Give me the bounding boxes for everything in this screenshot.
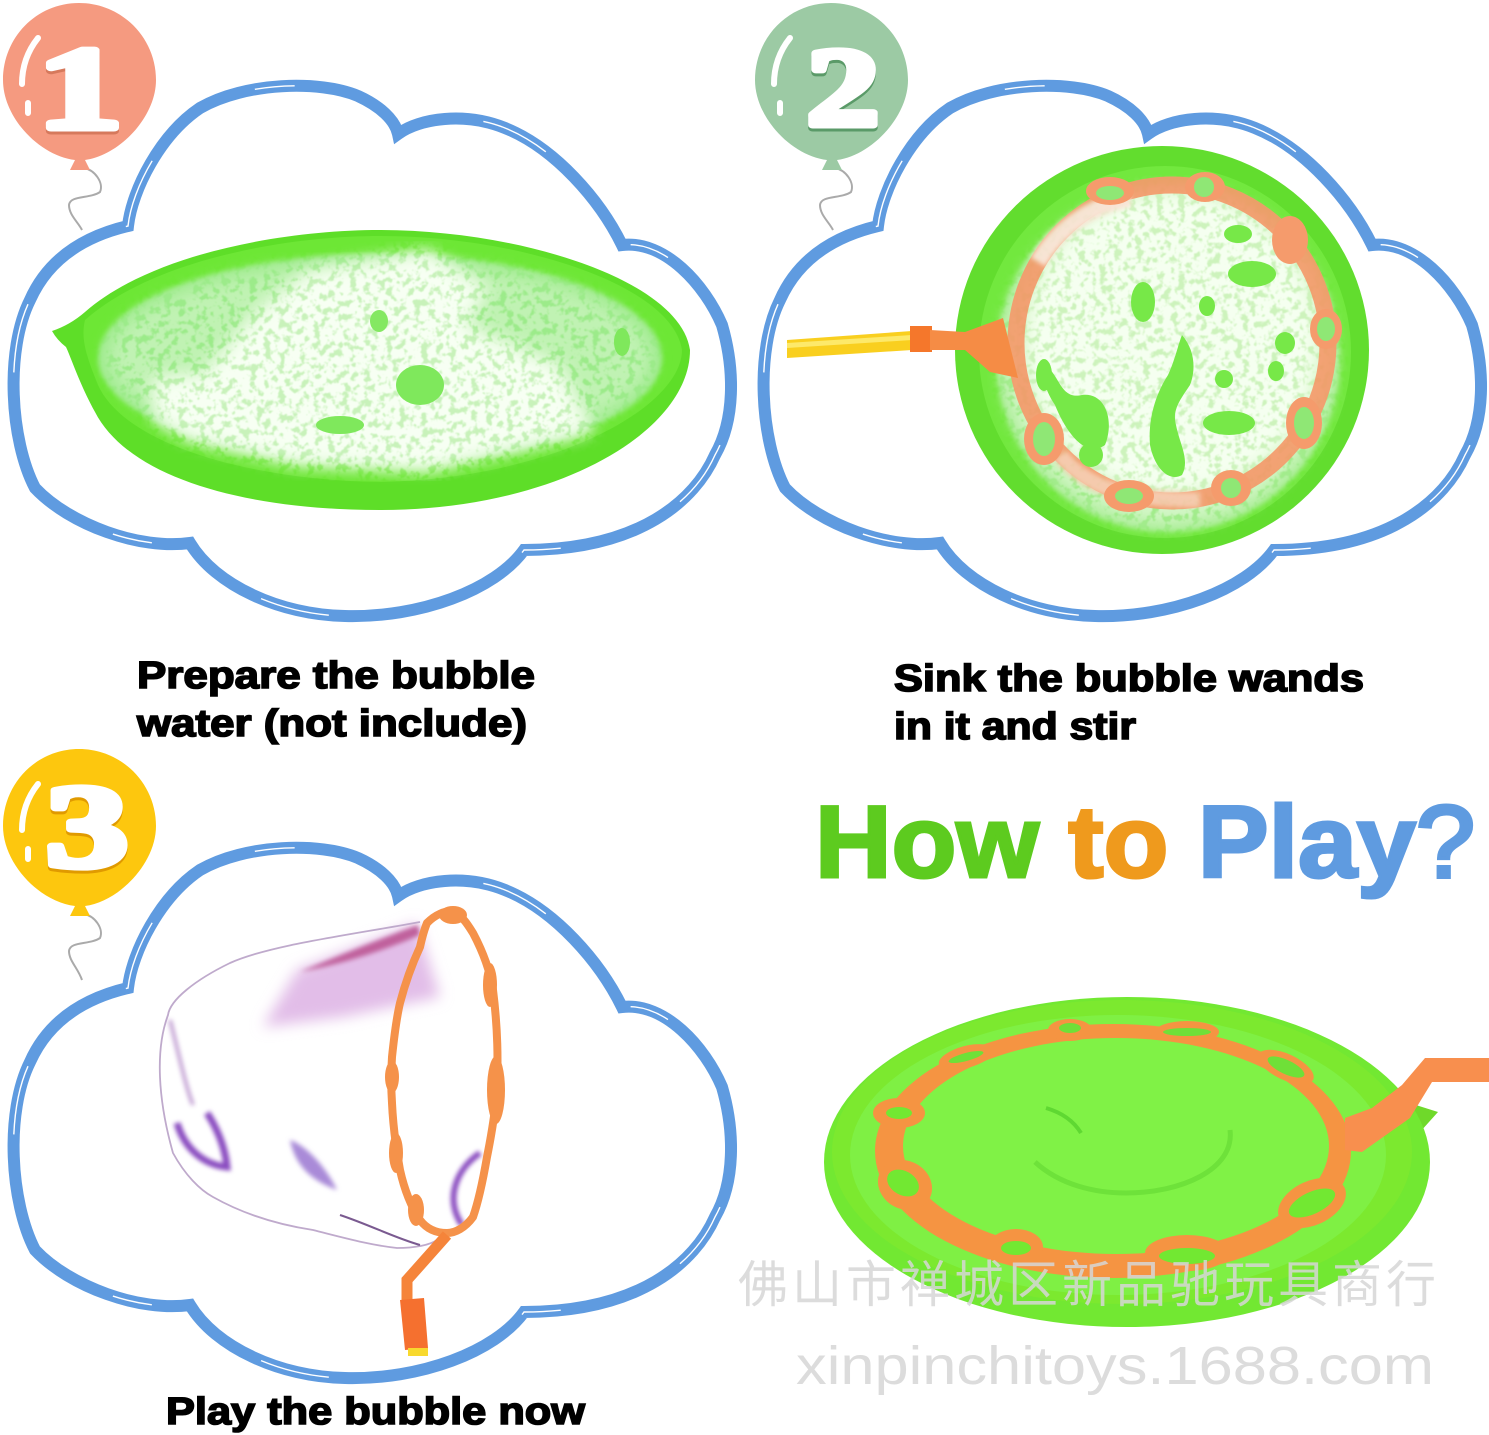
balloon 1 [3, 3, 156, 230]
step 2 caption [894, 658, 1364, 748]
green tray with foam [52, 230, 690, 510]
bubble ring [869, 1019, 1354, 1278]
watermark [738, 1257, 1436, 1396]
heading: How to Play? [815, 785, 1475, 899]
step 1 panel [3, 3, 731, 616]
bubble wand ring [385, 906, 505, 1356]
step 1 caption: Prepare the bubble [137, 655, 535, 697]
cloud outline 1 [14, 86, 731, 616]
wand handle [1345, 1058, 1489, 1152]
balloon 2: 2 [807, 26, 879, 150]
watermark: xinpinchitoys.1688.com [796, 1336, 1434, 1396]
wand ring in foam [1016, 185, 1328, 501]
tray smile relief [1035, 1108, 1230, 1193]
step 2 caption: Sink the bubble wands [894, 658, 1364, 700]
balloon 3: 3 [46, 762, 128, 892]
product photo: tray with wand [824, 997, 1489, 1327]
balloon 2 [755, 3, 908, 230]
cloud outline 3 [14, 848, 731, 1378]
watermark: 佛山市禅城区新品驰玩具商行 [738, 1257, 1436, 1313]
step 1 caption: water (not include) [136, 703, 527, 745]
step 2 panel [755, 3, 1481, 616]
step 2 caption: in it and stir [894, 706, 1136, 748]
bubble wand handle [787, 318, 1018, 378]
tray [824, 997, 1438, 1327]
balloon 1: 1 [37, 23, 123, 154]
step 3 caption: Play the bubble now [166, 1391, 585, 1433]
step 3 panel [3, 749, 731, 1378]
cloud outline 2 [764, 86, 1481, 616]
soap bubble [160, 922, 480, 1248]
balloon 3 [3, 749, 156, 980]
round tray with foam [955, 146, 1369, 554]
step 1 caption [136, 655, 535, 745]
